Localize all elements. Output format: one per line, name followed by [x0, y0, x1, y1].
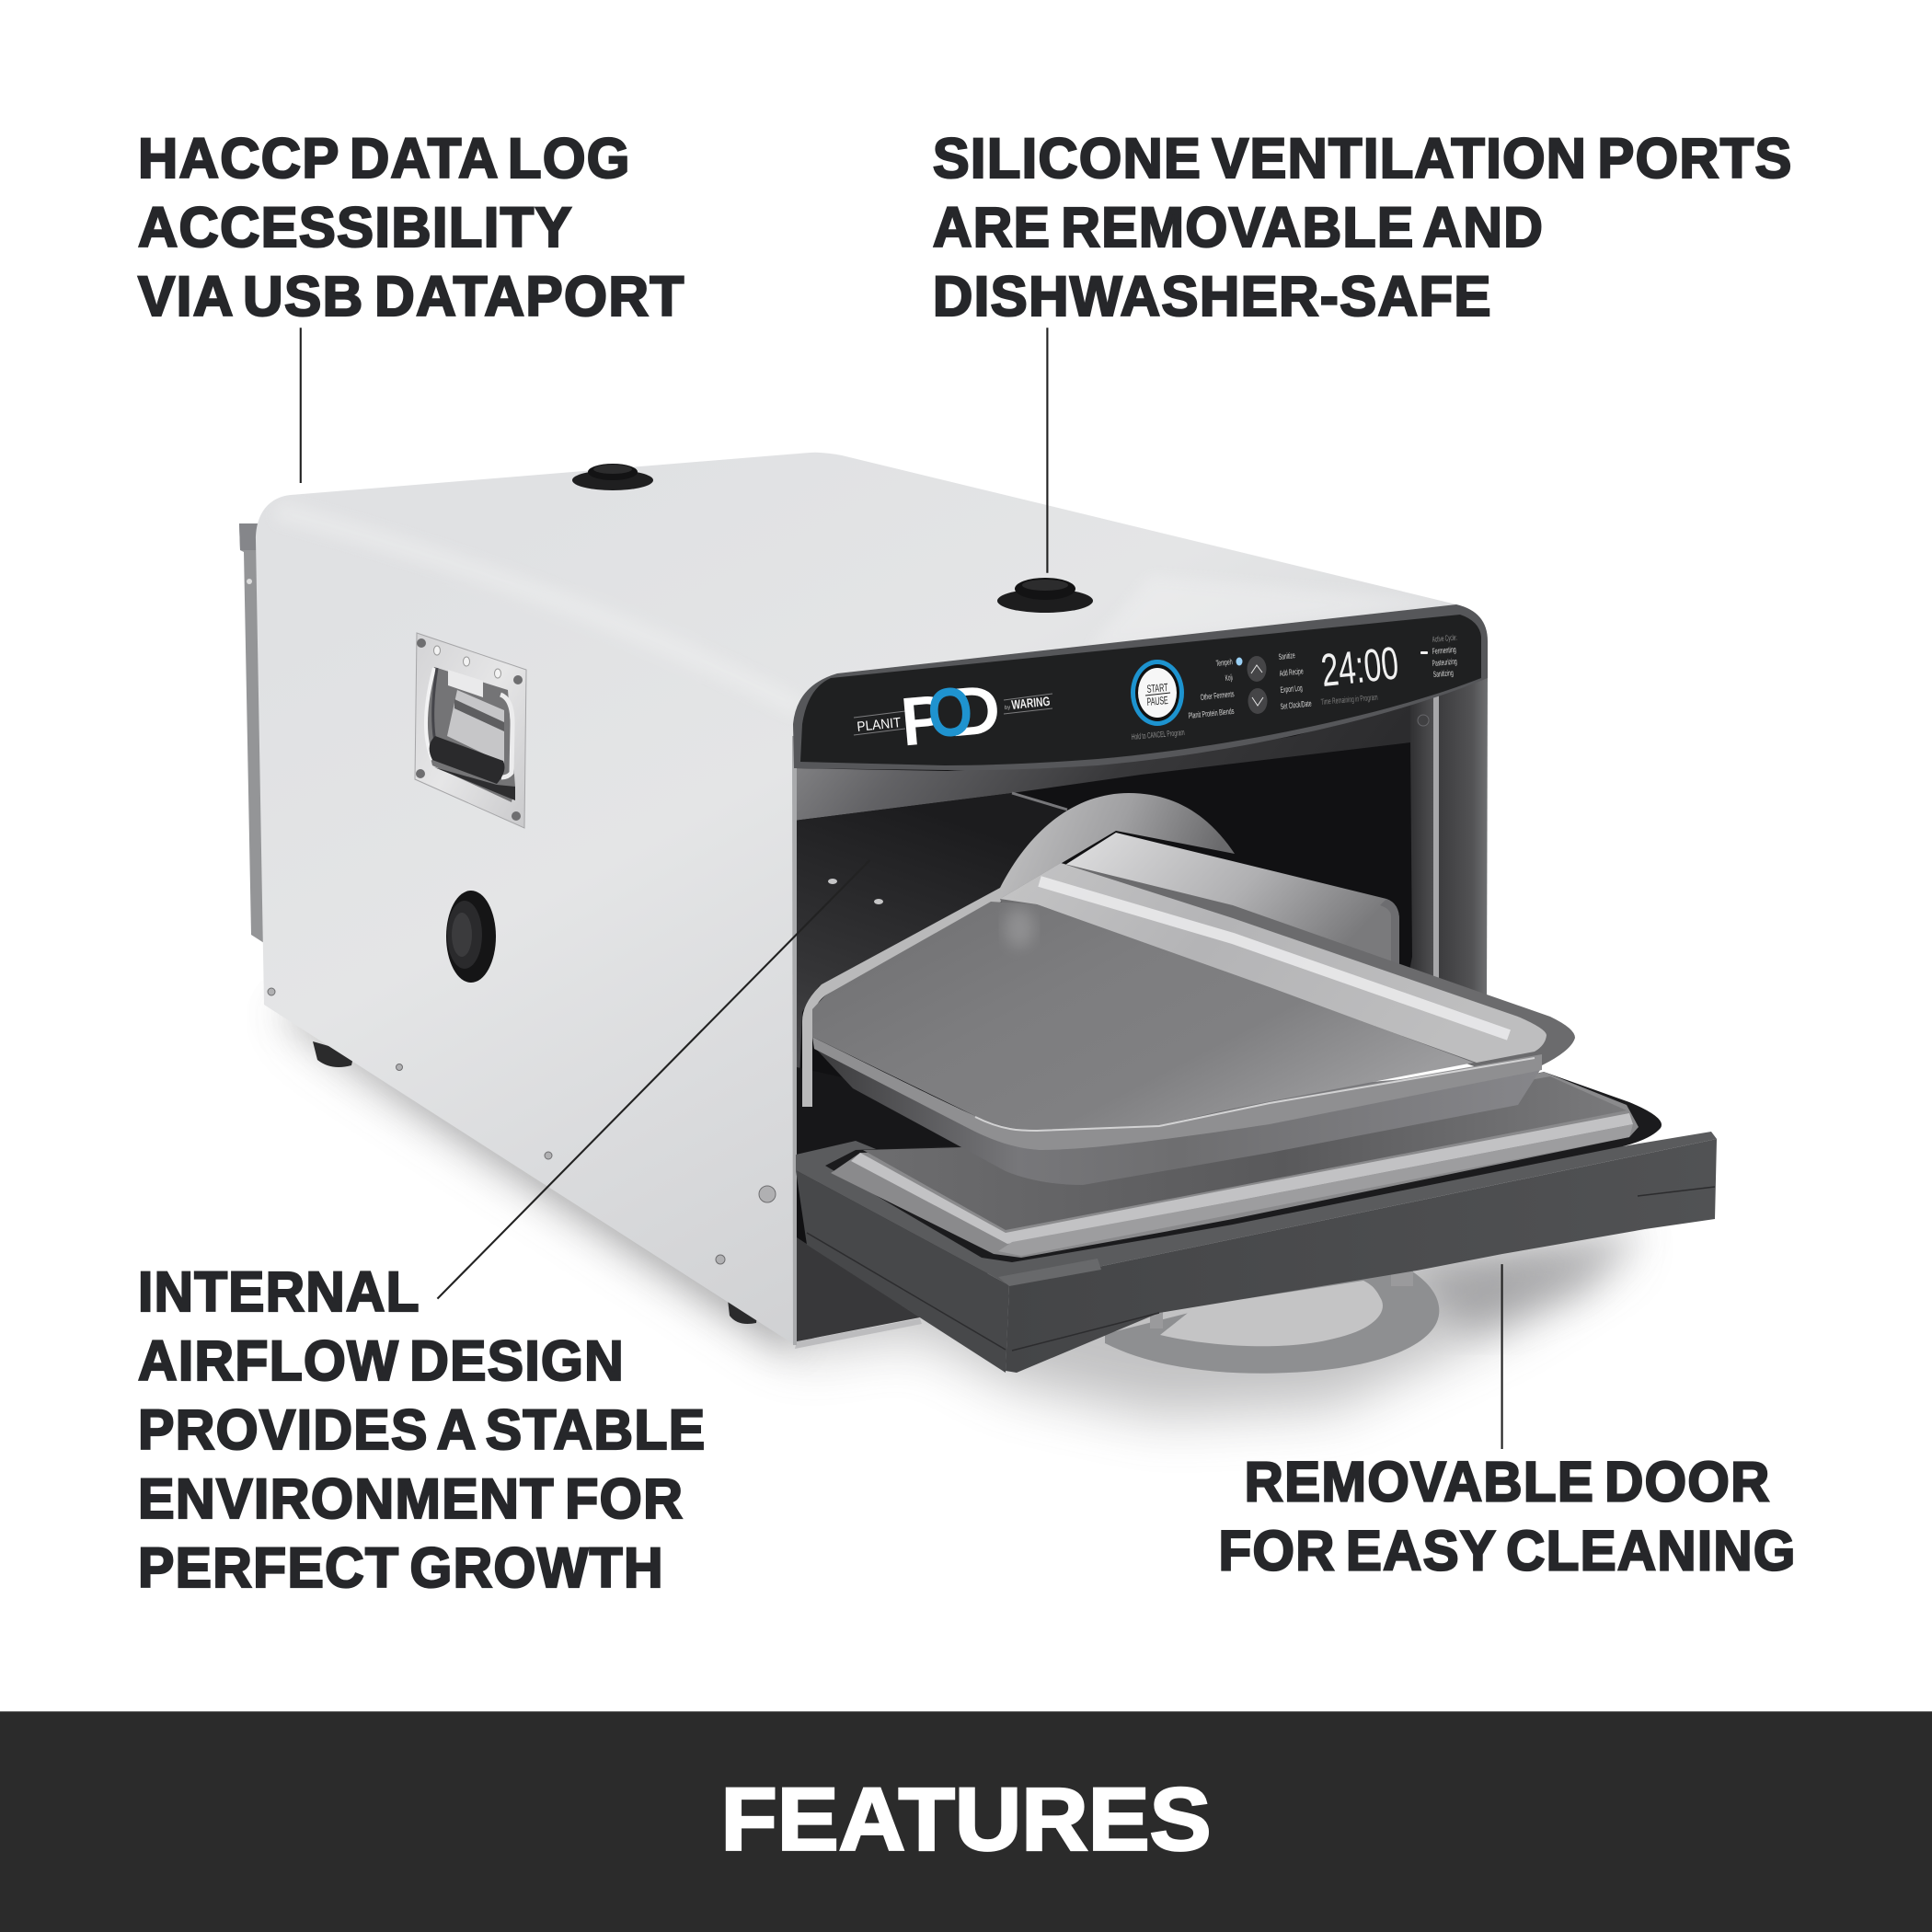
active cycle list: Fermenting	[1432, 645, 1456, 656]
door front face	[1006, 1139, 1717, 1373]
lower opening	[797, 1237, 920, 1341]
tray front rim	[812, 1037, 1542, 1150]
back tray	[1058, 833, 1399, 975]
fold-down side handle	[415, 633, 526, 828]
footer band	[0, 1711, 1932, 1932]
time remaining: Time Remaining in Program	[1320, 693, 1378, 707]
heat plate stem	[802, 888, 1005, 1107]
by Waring	[1004, 694, 1052, 714]
inner screws	[828, 879, 883, 904]
function labels	[1278, 650, 1312, 711]
ceiling band	[794, 704, 1410, 821]
frame bright strip	[1433, 695, 1439, 984]
start pause button: START	[1146, 681, 1169, 696]
callout: HACCP data log: HACCP DATA LOG	[138, 127, 631, 190]
function labels: Sanitize	[1278, 650, 1295, 661]
door tray gasket	[825, 1072, 1662, 1262]
function labels: Export Log	[1280, 684, 1303, 695]
foot right	[727, 1292, 758, 1324]
blue indicator	[1236, 658, 1243, 666]
callout: silicone ventilation ports: SILICONE VENTILATION PORTS	[933, 127, 1793, 190]
door seam	[807, 1187, 1715, 1351]
function labels: Add Recipe	[1279, 666, 1304, 678]
logo O centre	[934, 690, 971, 736]
rear housing	[239, 523, 264, 943]
active cycle list: Sanitizing	[1432, 668, 1454, 679]
upper tray body	[814, 1047, 1542, 1185]
foot left	[313, 1041, 354, 1067]
POD logo D: D	[947, 673, 1002, 749]
by Waring: WARING	[1011, 694, 1051, 712]
frame column	[1409, 692, 1435, 984]
door top rim	[796, 1132, 1717, 1285]
left inner wall	[794, 793, 1067, 1104]
leader line: USB dataport	[300, 328, 302, 483]
bottom lip	[795, 1318, 922, 1349]
active cycle list: Active Cycle:	[1432, 633, 1457, 644]
POD logo P: P	[899, 683, 950, 758]
up button	[1248, 656, 1267, 682]
side connector socket	[446, 891, 496, 983]
hold to cancel text: Hold to CANCEL Program	[1131, 728, 1185, 742]
cabinet body	[256, 453, 1456, 1345]
indicator dash	[1420, 651, 1428, 654]
lower tray	[831, 1072, 1639, 1258]
floor reflection	[1005, 907, 1034, 948]
recipe labels: Other Ferments	[1200, 689, 1235, 702]
tray back wall highlight	[1000, 863, 1547, 1063]
door support ring	[1105, 1262, 1439, 1374]
front left edge	[792, 736, 797, 1345]
upper tray back wall	[1000, 863, 1575, 1067]
PLANIT wordmark: PLANIT	[857, 715, 902, 735]
rear ventilation port	[572, 464, 653, 490]
leader line: removable door	[1501, 1264, 1503, 1449]
screws on cabinet	[268, 988, 776, 1264]
callout: removable door	[1219, 1450, 1797, 1581]
by Waring: by	[1005, 705, 1011, 711]
leader line: internal airflow	[437, 860, 870, 1299]
frame right side	[1435, 667, 1488, 1007]
rail	[1012, 793, 1067, 810]
callout: HACCP data log: VIA USB DATAPORT	[138, 265, 685, 328]
tray floor	[812, 902, 1474, 1130]
callout: silicone ventilation ports	[933, 127, 1793, 328]
callout: silicone ventilation ports: ARE REMOVABLE AND	[933, 196, 1544, 259]
callout: internal airflow design: ENVIRONMENT FOR	[138, 1467, 684, 1530]
active cycle list: Pasteurizing	[1432, 657, 1457, 668]
region under tray	[797, 1067, 1012, 1178]
start pause button: PAUSE	[1146, 694, 1168, 708]
callout: removable door: FOR EASY CLEANING	[1219, 1519, 1797, 1581]
heat plate dome	[1000, 793, 1235, 900]
recipe labels: Planit Protein Blends	[1188, 707, 1235, 720]
active cycle list	[1432, 633, 1457, 679]
callout: removable door: REMOVABLE DOOR	[1245, 1450, 1771, 1512]
tray rim highlight	[975, 1058, 1535, 1131]
recipe labels: Tempeh	[1215, 657, 1233, 668]
recipe labels	[1188, 657, 1235, 720]
callout: internal airflow design	[138, 1260, 706, 1599]
function labels: Set Clock/Date	[1280, 698, 1312, 711]
product photo: Planit Pod oven	[239, 453, 1717, 1417]
callout: internal airflow design: AIRFLOW DESIGN	[138, 1329, 625, 1392]
callout: silicone ventilation ports: DISHWASHER-SAFE	[933, 265, 1492, 328]
callout: internal airflow design: PERFECT GROWTH	[138, 1536, 664, 1599]
callout: HACCP data log	[138, 127, 685, 328]
door corner rim	[998, 1259, 1101, 1286]
start pause button	[1131, 660, 1184, 726]
footer title: FEATURES	[720, 1770, 1212, 1869]
frame screw	[1418, 715, 1429, 726]
recipe labels: Koji	[1225, 673, 1233, 683]
callout: internal airflow design: PROVIDES A STABLE	[138, 1398, 706, 1461]
POD logo O: O	[926, 674, 974, 750]
callout: HACCP data log: ACCESSIBILITY	[138, 196, 573, 259]
front ventilation port	[997, 578, 1093, 613]
leader line: ventilation port	[1046, 328, 1048, 573]
oven opening	[794, 685, 1435, 1345]
down button	[1248, 688, 1268, 714]
callout: internal airflow design: INTERNAL	[138, 1260, 420, 1323]
door side face	[796, 1170, 1009, 1373]
digital time display: 24:00	[1318, 637, 1401, 696]
control panel	[793, 604, 1488, 770]
floor shadow	[271, 1007, 1647, 1417]
